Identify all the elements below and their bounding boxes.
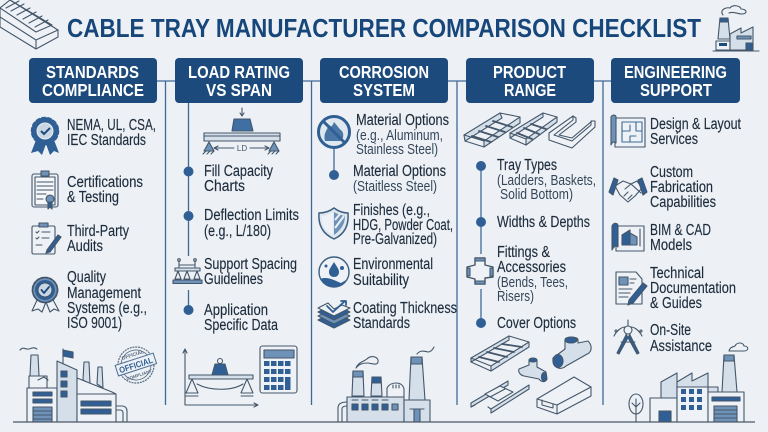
item: fill capacity: Charts	[204, 178, 245, 195]
item: NEMA standards	[67, 117, 156, 149]
ground line	[13, 421, 755, 423]
item: certifications	[67, 174, 143, 206]
item: material options: Stainless Steel)	[356, 142, 438, 158]
item: quality systems: Quality	[67, 269, 106, 286]
item: material options	[356, 112, 449, 158]
panel: product range	[464, 58, 596, 414]
item: design and layout: Services	[650, 131, 698, 148]
item: tray types: Tray Types	[497, 157, 557, 174]
icon: official stamp: COMPLIANT	[126, 368, 153, 381]
item: third-party audits	[67, 223, 129, 255]
item: BIM and CAD: Models	[650, 237, 692, 254]
icon: document with pen	[616, 272, 647, 305]
timeline	[184, 103, 194, 315]
item: application data	[204, 302, 278, 334]
item: fill capacity: Fill Capacity	[204, 163, 273, 180]
header: corrosion system: CORROSION	[339, 62, 429, 82]
item: design and layout	[650, 116, 742, 148]
header: load rating: VS SPAN	[206, 80, 272, 100]
icon: BIM model	[612, 223, 644, 251]
item: quality systems	[67, 269, 147, 332]
header: engineering support	[611, 58, 740, 103]
illustration: factory with flag	[20, 348, 127, 422]
header: corrosion system	[320, 58, 448, 103]
item: fittings and accessories: Accessories	[497, 259, 566, 276]
item: quality systems: Management	[67, 285, 142, 302]
item: on-site assistance: On-Site	[650, 322, 691, 339]
icon: clipboard	[32, 171, 58, 209]
item: on-site assistance	[650, 322, 712, 355]
item: custom fabrication	[650, 164, 716, 211]
item: material options: (e.g., Aluminum,	[356, 128, 443, 144]
item: quality systems: Systems (e.g.,	[67, 300, 147, 317]
item: custom fabrication: Capabilities	[650, 194, 716, 211]
item: widths and depths: Widths & Depths	[497, 214, 590, 231]
item: support spacing: Guidelines	[204, 271, 263, 288]
item: on-site assistance: Assistance	[650, 338, 712, 355]
item: fittings and accessories: (Bends, Tees,	[497, 275, 568, 291]
item: material options second: (Staitless Steel)	[353, 179, 437, 195]
item: deflection limits: Deflection Limits	[204, 207, 299, 224]
icon: handshake	[609, 178, 647, 202]
icon: calculator	[260, 346, 297, 393]
item: application data: Specific Data	[204, 317, 278, 334]
illustration: tray fittings and covers	[471, 336, 591, 414]
icon: audit clipboard	[32, 223, 61, 254]
item: deflection limits: (e.g., L/180)	[204, 223, 271, 240]
item: finishes	[353, 202, 453, 248]
timeline	[329, 148, 339, 180]
panel: load rating vs span	[173, 58, 303, 407]
item: technical documentation: Technical	[650, 265, 704, 282]
item: fittings and accessories: Fittings &	[497, 244, 551, 261]
item: material options second: Material Options	[353, 163, 446, 180]
item: third-party audits: Third-Party	[67, 223, 129, 240]
icon: blueprint	[611, 115, 645, 147]
icon: beam load diagram	[203, 108, 280, 154]
chart: beam deflection graph	[183, 349, 258, 407]
header: product range	[466, 58, 594, 103]
header: load rating	[175, 58, 303, 103]
illustration: factory with chimneys	[338, 347, 434, 422]
item: certifications: Certifications	[67, 174, 143, 191]
item: NEMA standards: NEMA, UL, CSA,	[67, 117, 156, 134]
item: custom fabrication: Custom	[650, 164, 693, 181]
header: product range: RANGE	[504, 80, 556, 100]
timeline	[476, 161, 486, 328]
icon: official stamp	[111, 342, 161, 388]
header: standards compliance: COMPLIANCE	[42, 80, 144, 100]
item: finishes: Pre-Galvanized)	[353, 231, 437, 248]
item: certifications: & Testing	[67, 189, 119, 206]
item: tray types: Solid Bottom)	[500, 187, 573, 203]
icon: official stamp: OFFICIAL	[118, 355, 154, 375]
item: technical documentation: Documentation	[650, 280, 736, 297]
item: fill capacity	[204, 163, 273, 195]
header: product range: PRODUCT	[493, 62, 566, 82]
item: quality systems: ISO 9001)	[67, 315, 122, 332]
header: standards compliance	[29, 58, 157, 103]
item: coating thickness: Coating Thickness	[353, 300, 457, 317]
item: support spacing: Support Spacing	[204, 256, 297, 273]
icon: water drop	[319, 257, 349, 287]
divider lines	[157, 81, 611, 405]
header: engineering support: SUPPORT	[640, 80, 712, 100]
item: tray types: (Ladders, Baskets,	[497, 173, 596, 189]
item: finishes: HDG, Powder Coat,	[353, 217, 453, 234]
item: custom fabrication: Fabrication	[650, 179, 713, 196]
item: design and layout: Design & Layout	[650, 116, 742, 133]
icon: official stamp: OFFICIAL	[121, 349, 145, 362]
item: deflection limits	[204, 207, 299, 240]
icon: support spacing	[173, 259, 202, 284]
panel: standards compliance	[20, 58, 161, 422]
icon: rosette	[31, 118, 59, 155]
header: engineering support: ENGINEERING	[624, 62, 727, 82]
item: BIM and CAD: BIM & CAD	[650, 222, 711, 239]
illustration: factory with tree	[629, 343, 748, 422]
item: finishes: Finishes (e.g.,	[353, 202, 430, 219]
icon: three tray types	[464, 113, 595, 148]
item: cover options: Cover Options	[497, 315, 576, 332]
item: tray types	[497, 157, 596, 203]
item: coating thickness	[353, 300, 457, 332]
icon: factory top right	[713, 6, 759, 51]
item: coating thickness: Standards	[353, 315, 410, 332]
icon: coating layers	[318, 301, 350, 328]
item: technical documentation: & Guides	[650, 295, 702, 312]
header: standards compliance: STANDARDS	[46, 62, 139, 82]
item: environmental suitability: Suitability	[353, 272, 409, 289]
header: corrosion system: SYSTEM	[353, 80, 415, 100]
item: technical documentation	[650, 265, 736, 312]
icon: no corrosion sign	[318, 116, 350, 148]
item: NEMA standards: IEC Standards	[67, 132, 146, 149]
item: fittings and accessories	[497, 244, 568, 305]
item: fittings and accessories: Risers)	[497, 289, 534, 305]
panel: corrosion system	[318, 58, 457, 422]
item: environmental suitability	[353, 256, 433, 289]
item: application data: Application	[204, 302, 268, 319]
header: load rating: LOAD RATING	[188, 62, 290, 82]
panel: engineering support	[609, 58, 748, 422]
icon: quality seal	[32, 278, 59, 312]
item: material options second	[353, 163, 446, 195]
icon: beam load diagram: LD	[237, 144, 247, 153]
icon: cable tray top left	[0, 0, 58, 49]
item: BIM and CAD	[650, 222, 711, 254]
item: material options: Material Options	[356, 112, 449, 129]
item: third-party audits: Audits	[67, 238, 103, 255]
item: environmental suitability: Environmental	[353, 256, 433, 273]
item: support spacing	[204, 256, 297, 288]
icon: drafting compass	[614, 320, 642, 354]
icon: shield	[319, 208, 348, 239]
icon: cross fitting	[467, 258, 493, 284]
